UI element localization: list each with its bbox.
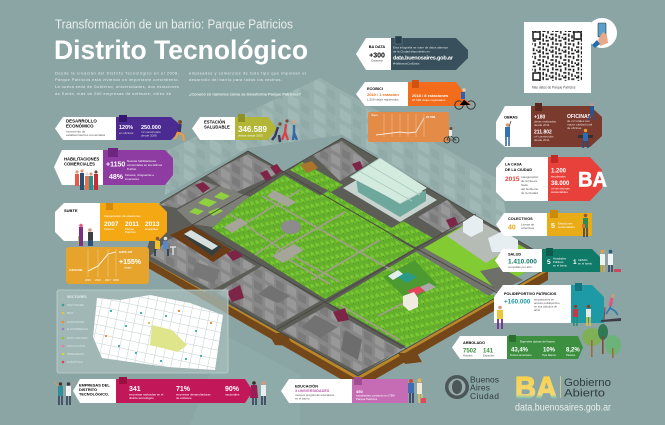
sports centre	[383, 260, 437, 311]
panel: obras: 211.802	[534, 130, 552, 136]
panel: arbolado: 8,2%	[566, 348, 580, 354]
panel: obras: m² construidos	[534, 134, 554, 138]
park gray lot	[177, 186, 250, 227]
panel: ecobici: 2018 / 8 estaciones	[412, 93, 449, 98]
panel: salud: CESAC	[578, 258, 588, 262]
panel: educación	[281, 377, 408, 403]
plaza circle	[281, 220, 301, 234]
panel: desarrollo económico	[55, 115, 178, 140]
icon: people waiting for subway	[78, 224, 93, 246]
panel: educación: estudiantes cursando en ITBA	[356, 394, 395, 398]
panel: salud	[495, 248, 601, 272]
park paths	[230, 190, 420, 340]
logo: BA Gobierno Abierto: BA	[515, 370, 557, 405]
panel: obras: OBRAS	[504, 116, 518, 120]
panel: habilitaciones comerciales: COMERCIALES	[64, 162, 95, 166]
subway station	[184, 230, 222, 256]
logo: BA Gobierno Abierto: data.buenosaires.gob.ar	[515, 402, 612, 414]
panel: polideportivo patricios	[494, 283, 604, 323]
panel: la casa de la ciudad: empleados	[551, 174, 566, 178]
panel: la casa de la ciudad: DE LA CIUDAD	[505, 168, 532, 172]
panel: empresas del distrito tecnológico: nacionales	[225, 392, 240, 396]
panel: habilitaciones comerciales: 8 años.	[127, 167, 137, 171]
station pit	[170, 225, 232, 262]
panel: empresas del distrito tecnológico: empresas radicadas en el	[129, 392, 164, 396]
panel: BA Data	[356, 36, 468, 70]
legend: E-COMMERCE	[67, 327, 88, 331]
panel: polideportivo patricios: asociaciones en	[534, 298, 555, 302]
panel: polideportivo patricios: en sus cálculos de	[534, 304, 557, 308]
panel: arbolado: 141	[483, 348, 494, 354]
panel: habilitaciones comerciales	[54, 148, 173, 185]
chart: subte passengers: +155%	[119, 259, 142, 266]
panel: salud: 5	[547, 259, 551, 266]
panel: obras: de oficinas	[567, 126, 582, 130]
panel: estación saludable: ESTACIÓN	[204, 120, 225, 124]
panel: salud: consultas por año	[508, 265, 532, 269]
panel: polideportivo patricios: +160.000	[504, 298, 531, 306]
panel: BA Data: data.buenosaires.gob.ar	[393, 56, 454, 62]
panel: habilitaciones comerciales: Nuevas habilitaciones	[127, 159, 157, 163]
panel: educación: museos programas educativos	[295, 393, 335, 397]
panel: desarrollo económico: en oficinas	[119, 131, 134, 135]
panel: desarrollo económico: 250.000	[141, 125, 161, 131]
icon: people with raised arms	[54, 381, 74, 405]
logo: Buenos Aires Ciudad	[445, 374, 499, 401]
panel: salud: Públicos	[553, 260, 564, 264]
legend: EDUCACIÓN	[67, 343, 85, 348]
panel: obras: OFICINAS	[567, 114, 592, 120]
icon: second cyclist	[444, 127, 459, 143]
logo: Buenos Aires Ciudad: Ciudad	[470, 391, 499, 401]
legend: DOMÓTICA	[67, 359, 83, 364]
title: Distrito Tecnológico	[54, 35, 308, 65]
panel: QR code: Más datos de Parque Patricios	[532, 86, 576, 90]
logo: BA Gobierno Abierto	[515, 370, 612, 414]
panel: arbolado: Paraíso	[566, 353, 576, 357]
chart: subte passengers: 2016	[95, 278, 101, 282]
panel: empresas del distrito tecnológico: EMPRESAS DEL	[79, 382, 110, 388]
panel: QR code	[524, 22, 591, 93]
heading	[54, 18, 308, 65]
panel: la casa de la ciudad: de la Ciudad	[521, 191, 538, 195]
panel: estación saludable: visitas desde 2013	[238, 134, 263, 138]
panel: la casa de la ciudad	[496, 155, 607, 201]
panel: subte: SUBTE	[64, 208, 78, 213]
patricios zone	[150, 325, 187, 352]
panel: subte	[55, 203, 167, 241]
panel: la casa de la ciudad: de la Nueva	[521, 179, 537, 183]
panel: educación: EDUCACIÓN	[295, 384, 318, 388]
panel: ecobici: 2010 / 1 estación	[367, 92, 399, 97]
panel: arbolado: 10%	[543, 348, 556, 354]
green strip east	[319, 191, 397, 236]
panel: sectores: SECTORES	[67, 295, 87, 299]
panel: subte: 2011	[125, 221, 139, 228]
icon: cyclist	[455, 88, 475, 109]
company dots	[105, 310, 212, 362]
legend	[62, 303, 88, 364]
sector street map	[93, 295, 223, 370]
icon: medical staff	[600, 250, 621, 272]
map base streets	[145, 138, 548, 376]
legend: DATA CENTER	[67, 336, 88, 340]
panel: estación saludable: SALUDABLE	[204, 124, 230, 130]
chart: subte passengers: 8.865.107	[119, 250, 133, 254]
icon: workers	[578, 103, 595, 148]
gray blocks with buildings	[150, 141, 470, 372]
panel: sectores	[57, 290, 228, 373]
panel: habilitaciones comerciales: inversores	[125, 177, 139, 181]
logo: BA Gobierno Abierto: Gobierno	[564, 377, 611, 389]
panel: polideportivo patricios: POLIDEPORTIVO PATRICIOS	[504, 292, 557, 296]
panel: subte: Parque	[125, 227, 134, 231]
panel: desarrollo económico: establecimientos comerciales	[66, 133, 106, 137]
icon: runner	[175, 120, 184, 141]
white buildings	[463, 215, 518, 252]
block plaza	[447, 219, 518, 263]
panel: la casa de la ciudad: sustentables	[551, 190, 568, 194]
panel: colectivos: COLECTIVOS	[508, 217, 533, 221]
junction brackets	[205, 292, 422, 390]
parking strip	[416, 248, 497, 296]
panel: la casa de la ciudad: 38.000	[551, 181, 570, 187]
panel: obras: mayor calidad total	[567, 122, 593, 126]
panel: polideportivo patricios: años	[534, 308, 541, 312]
panel: BA Data: +300	[369, 52, 385, 60]
parking lot	[480, 267, 523, 292]
panel: colectivos: Estaciones	[558, 222, 573, 226]
intro text: La nueva sede de Gobierno, universidades, dos estaciones	[55, 84, 179, 89]
panel: BA Data: de la Ciudad disponibles en	[393, 50, 430, 54]
panel: colectivos: colectivos	[521, 226, 535, 230]
panel: ecobici: ECOBICI	[367, 87, 383, 91]
panel: salud: SALUD	[508, 252, 521, 256]
intro text	[55, 70, 306, 96]
panel: polideportivo patricios: acceso polideportivo	[534, 301, 560, 305]
panel: empresas del distrito tecnológico: 71%	[176, 386, 191, 393]
panel: estación saludable	[192, 114, 277, 140]
panel: obras: +180	[534, 114, 545, 120]
panel: empresas del distrito tecnológico: empresas desarrolladoras	[176, 392, 211, 396]
panel: subte: Caseros	[104, 227, 115, 231]
panel: arbolado	[452, 335, 583, 359]
intro text: Parque Patricios está viviendo un importante crecimiento.	[55, 77, 179, 82]
panel: desarrollo económico: DESARROLLO	[66, 118, 97, 124]
panel: arbolado: ARBOLADO	[463, 341, 485, 345]
chart: subte passengers: 2018	[113, 278, 119, 282]
panel: arbolado: Tipa blanca	[542, 353, 556, 357]
panel: BA Data: #HablamosConDatos	[393, 62, 420, 66]
panel: empresas del distrito tecnológico: 90%	[225, 386, 240, 393]
panel: arbolado: Especies típicas del barrio	[520, 340, 555, 344]
icon: students	[408, 378, 426, 403]
logo: BA white: BA	[578, 168, 607, 192]
panel: la casa de la ciudad: 2015	[505, 176, 520, 183]
isometric map of Parque Patricios	[145, 138, 548, 390]
panel: habilitaciones comerciales: HABILITACIONES	[64, 156, 99, 162]
panel: ecobici: 1.500 viajes registrados	[367, 98, 399, 102]
panel: obras: de m² totales son	[567, 119, 590, 123]
chart: subte passengers: 2015	[85, 278, 91, 282]
panel: empresas del distrito tecnológico: 341	[129, 386, 141, 393]
panel: habilitaciones comerciales: Kioscos, droguerías e	[125, 173, 154, 177]
panel: empresas del distrito tecnológico	[73, 377, 253, 403]
panel: salud: en el barrio	[578, 262, 592, 266]
panel: obras	[496, 103, 602, 147]
panel: obras: desde 2011	[534, 138, 550, 142]
panel: educación: Parque Patricios	[356, 397, 378, 401]
icon: runners	[272, 119, 297, 142]
logo: Buenos Aires Ciudad: Aires	[470, 382, 490, 392]
panel: desarrollo económico: Incremento de	[66, 130, 86, 134]
intro text: desarrollo del barrio para todos los vecinos.	[189, 77, 282, 82]
logo: BA Gobierno Abierto: Abierto	[564, 388, 605, 400]
panel: educación: 450	[356, 389, 363, 394]
panel: arbolado: 7502	[463, 348, 477, 354]
panel: subte: Inauguración de estaciones	[104, 214, 141, 218]
chart: subte passengers: 5.000.000	[69, 268, 83, 272]
block pins	[195, 161, 458, 322]
panel: arbolado: Especies	[483, 354, 495, 358]
chart: subte passengers: viajes	[124, 266, 132, 270]
east lawn	[424, 219, 546, 289]
panel: empresas del distrito tecnológico: DISTRITO	[79, 387, 97, 392]
panel: educación: en el barrio	[295, 396, 310, 400]
panel: habilitaciones comerciales: +1150	[106, 162, 125, 168]
green block east	[385, 221, 433, 247]
subtitle: Transformación de un barrio: Parque Patricios	[55, 18, 293, 32]
panel: ecobici	[356, 80, 465, 106]
legend: HARDWARE	[67, 320, 84, 324]
panel: desarrollo económico: m² construidos	[141, 130, 161, 134]
panel: la casa de la ciudad: Inauguración	[521, 175, 539, 179]
panel: subte: 2007	[104, 221, 119, 228]
panel: subte: 2013	[145, 221, 160, 228]
panel: la casa de la ciudad: del Gobierno	[521, 187, 539, 191]
logo: Buenos Aires Ciudad: Buenos	[470, 374, 499, 384]
panel: empresas del distrito tecnológico: TECNOLÓGICO.	[79, 392, 109, 396]
panel: la casa de la ciudad: 1.200	[551, 168, 567, 174]
panel: desarrollo económico: ECONÓMICO	[66, 124, 94, 128]
panel: la casa de la ciudad: m² de oficinas	[551, 186, 570, 190]
panel: obras: obras realizadas	[534, 120, 557, 124]
icon: seated people	[155, 237, 176, 256]
panel: obras: desde 2011	[534, 123, 550, 127]
panel: arbolado: Árboles	[463, 354, 473, 358]
intro text: empleados y comercios de todo tipo que impulsan el	[189, 70, 306, 76]
panel: subte: Hospitales	[145, 227, 159, 231]
chart: ecobici trips: 97.508	[426, 115, 436, 119]
chart: ecobici trips	[368, 112, 449, 142]
icon: business people	[250, 381, 266, 405]
panel: arbolado: 43,4%	[511, 348, 529, 354]
map edge	[148, 258, 548, 389]
panel: desarrollo económico: desde 2008	[141, 134, 157, 138]
plaza lots	[224, 190, 304, 263]
icon: worker with hammer	[505, 121, 511, 146]
panel: estación saludable: 346.589	[238, 125, 267, 134]
panel: desarrollo económico: 120%	[119, 125, 133, 131]
panel: colectivos: sustentables	[558, 225, 575, 229]
panel: empresas del distrito tecnológico: de software	[176, 396, 192, 400]
intro text: de Subte, más de 260 empresas de software, miles de	[55, 91, 171, 96]
legend: INGENIERÍA	[67, 352, 84, 356]
panel: arbolado: Fresno americano	[510, 353, 532, 357]
panel: subte: Patricios	[125, 230, 136, 234]
panel: salud: 1.410.000	[508, 258, 537, 266]
main park	[212, 175, 414, 299]
park south-east	[329, 251, 497, 347]
panel: empresas del distrito tecnológico: distrito tecnológico	[129, 396, 154, 400]
panel: salud: 1	[573, 259, 577, 266]
panel: BA Data: Esta infografía se nutre de datos abiertos	[393, 46, 448, 50]
panel: la casa de la ciudad: LA CASA	[505, 162, 522, 166]
icon: athletes	[497, 294, 621, 329]
orange playground	[300, 161, 318, 173]
panel: BA Data: BA DATA	[369, 45, 385, 49]
chart: ecobici trips: Viajes	[371, 114, 379, 117]
icon: phone scanning	[587, 18, 617, 48]
panel: educación: 3 UNIVERSIDADES	[295, 389, 330, 393]
intro text: Desde la creación del Distrito Tecnológico en el 2008,	[55, 70, 179, 76]
icon: commuter	[582, 214, 588, 237]
panel: colectivos: 40	[508, 224, 516, 232]
roads	[160, 138, 548, 376]
intro text: ¿Conocé en números cómo se transforma Parque Patricios?	[189, 92, 302, 96]
panel: salud: en el barrio	[553, 264, 567, 268]
green strip north	[290, 162, 343, 192]
icon: trees	[582, 324, 621, 358]
chart: subte passengers	[66, 247, 149, 284]
panel: colectivos	[496, 210, 592, 236]
panel: la casa de la ciudad: Sede	[521, 183, 528, 187]
panel: salud: Hospitales	[553, 256, 567, 260]
panel: habilitaciones comerciales: comerciales en los últimos	[127, 163, 163, 167]
glass building	[343, 158, 437, 222]
ghost city background	[165, 78, 510, 425]
panel: colectivos: 5	[551, 223, 555, 230]
panel: BA Data: Datasets	[371, 58, 383, 62]
legend: BPO	[67, 311, 74, 315]
panel: habilitaciones comerciales: 48%	[109, 174, 124, 181]
panel: ecobici: 97.508 viajes registrados	[412, 98, 446, 102]
panel: colectivos: Líneas de	[521, 222, 535, 226]
icon: group of people	[75, 169, 98, 190]
legend: SOFTWARE	[67, 303, 84, 307]
chart: subte passengers: 2017	[105, 278, 111, 282]
